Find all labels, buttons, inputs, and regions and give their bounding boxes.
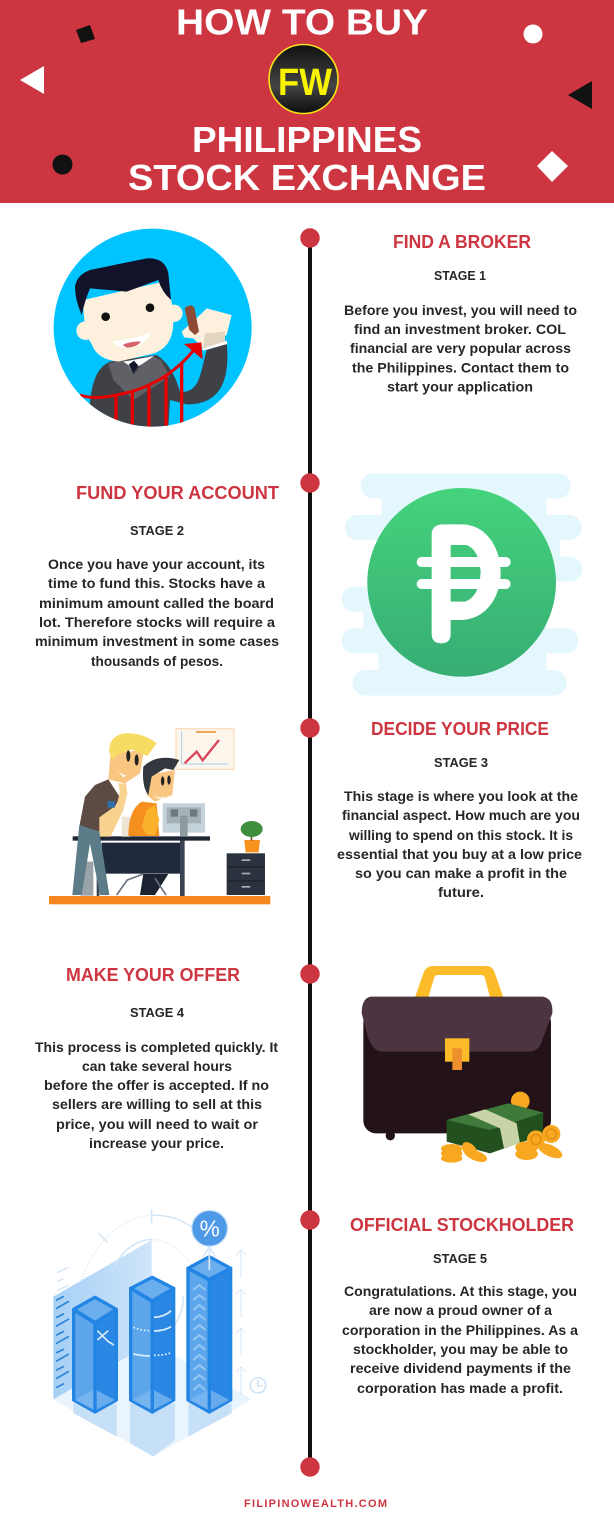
body: stage 3: willing to spend on this stock. It is [348,827,573,843]
icon: peso coin [342,473,582,696]
body: stage 3: future. [438,884,484,900]
body: stage 2: time to fund this. Stocks have a [48,575,265,591]
face [83,282,173,362]
percent connector [203,1247,215,1270]
percent badge: % [200,1215,220,1241]
body: stage 2: minimum investment in some cases [35,633,279,649]
seated person legs [140,874,168,895]
body: stage 1: the Philippines. Contact them to [352,360,569,376]
heading: official stockholder: OFFICIAL STOCKHOLDER [350,1215,574,1235]
panel: stage 3 text [337,719,582,900]
filing cabinet [227,853,265,895]
logo: FW badge: FW [278,62,332,104]
panel: stage 1 text [344,232,577,394]
decorative shape: black diamond [76,25,95,43]
handle [415,966,503,997]
percent badge [192,1210,228,1246]
body: stage 5: are now a proud owner of a [369,1302,552,1318]
body: stage 4 [35,1039,278,1151]
body: stage 1 [344,302,577,394]
suit [89,343,227,428]
decorative shape: white diamond [537,151,568,182]
body: stage 4: This process is completed quickly. It [35,1039,278,1055]
body: stage 4: before the offer is accepted. If no [44,1077,269,1093]
logo: FW badge [269,44,338,114]
clasp [445,1038,469,1062]
title line: how to buy: HOW TO BUY [176,2,428,42]
standing person [72,733,157,895]
body: stage 1: start your application [387,378,533,394]
body: stage 2: thousands of pesos. [91,653,223,669]
body: stage 5: stockholder, you may be able to [353,1341,568,1357]
hair [75,258,171,315]
body: stage 1: Before you invest, you will need to [344,302,577,318]
timeline [300,228,320,1477]
ear left [76,321,89,340]
panel: stage 4 text [35,965,278,1151]
wall chart [176,729,234,769]
column 1 markings [97,1331,114,1345]
floor [53,1343,252,1457]
column 2 markings [133,1311,171,1356]
tie [129,361,139,374]
body: stage 2: Once you have your account, its [48,556,265,572]
cloud background [342,473,582,696]
potted plant [241,821,263,852]
seated person [128,758,179,836]
body: stage 4: sellers are willing to sell at this [52,1096,262,1112]
body: stage 3: so you can make a profit in the [355,865,567,881]
column 3 chevrons [193,1285,205,1390]
body: stage 5: Congratulations. At this stage, you [344,1283,577,1299]
heading: make your offer: MAKE YOUR OFFER [66,965,240,985]
column shadows [73,1403,232,1457]
panel: stage 2 text [35,483,279,669]
chart arrow head [184,342,203,359]
decorative shape: white triangle [20,66,44,94]
icon: isometric bar chart [53,1209,266,1457]
case foot [386,1131,395,1140]
label: stage 1: STAGE 1 [434,268,486,283]
cash stack [447,1103,543,1153]
peso sign [422,524,506,643]
case body [363,1010,551,1133]
body: stage 3 [337,788,582,900]
footer: website: FILIPINOWEALTH.COM [244,1498,387,1510]
heading: fund your account: FUND YOUR ACCOUNT [76,483,279,503]
header banner [0,0,614,203]
shirt and tie [123,356,154,374]
label: stage 4: STAGE 4 [130,1005,185,1020]
clock [250,1378,266,1393]
ear right [172,304,183,322]
column 3 [188,1257,231,1412]
icon: briefcase with cash and coins [362,966,564,1164]
body: stage 2: minimum amount called the board [39,595,274,611]
hand [182,308,232,348]
icon: two people at a desk [49,729,270,904]
flap [362,997,552,1052]
chair [117,874,166,895]
desk [73,836,210,896]
label: stage 3: STAGE 3 [434,755,488,770]
mouth [113,333,151,348]
coin [367,488,556,677]
dotted arcs [82,1209,193,1327]
body: stage 5: corporation in the Philippines. As a [342,1322,578,1338]
upward arrows [237,1250,245,1395]
floor [49,896,270,904]
back wall [53,1240,152,1399]
title line: philippines: PHILIPPINES [192,119,422,160]
body: stage 1: financial are very popular across [350,340,571,356]
body: stage 3: essential that you buy at a low price [337,846,582,862]
body: stage 5: corporation has made a profit. [357,1380,563,1396]
pen [185,306,199,335]
label: stage 5: STAGE 5 [433,1251,487,1266]
title line: stock exchange: STOCK EXCHANGE [128,157,486,198]
heading: find a broker: FIND A BROKER [393,232,531,252]
body: stage 4: price, you will need to wait or [56,1116,259,1132]
computer tower [81,862,93,896]
body: stage 5 [342,1283,578,1396]
body: stage 2: lot. Therefore stocks will require a [39,614,275,630]
body: stage 4: can take several hours [82,1058,232,1074]
scale ticks [57,1297,68,1387]
body: stage 5: receive dividend payments if the [350,1360,571,1376]
body: stage 3: financial aspect. How much are you [342,807,580,823]
coin behind cash [511,1092,530,1110]
decorative shape: white circle [524,24,542,44]
sleeve cuff [202,341,227,351]
body: stage 2 [35,556,279,669]
lapel [108,355,170,400]
label: stage 2: STAGE 2 [130,523,184,538]
body: stage 4: increase your price. [89,1135,224,1151]
body: stage 1: find an investment broker. COL [354,321,566,337]
decorative shape: black triangle [568,81,592,109]
eyes [101,312,110,321]
coins left [441,1139,489,1164]
body: stage 3: This stage is where you look at the [344,788,578,804]
heading: decide your price: DECIDE YOUR PRICE [371,719,549,739]
chart bars [80,351,193,428]
monitor [163,803,205,836]
icon: businessman drawing a rising chart [54,229,252,428]
coins right [515,1125,564,1161]
column 1 [74,1297,116,1412]
panel: stage 5 text [342,1215,578,1396]
decorative shape: black circle [52,154,72,174]
column 2 [131,1277,174,1412]
